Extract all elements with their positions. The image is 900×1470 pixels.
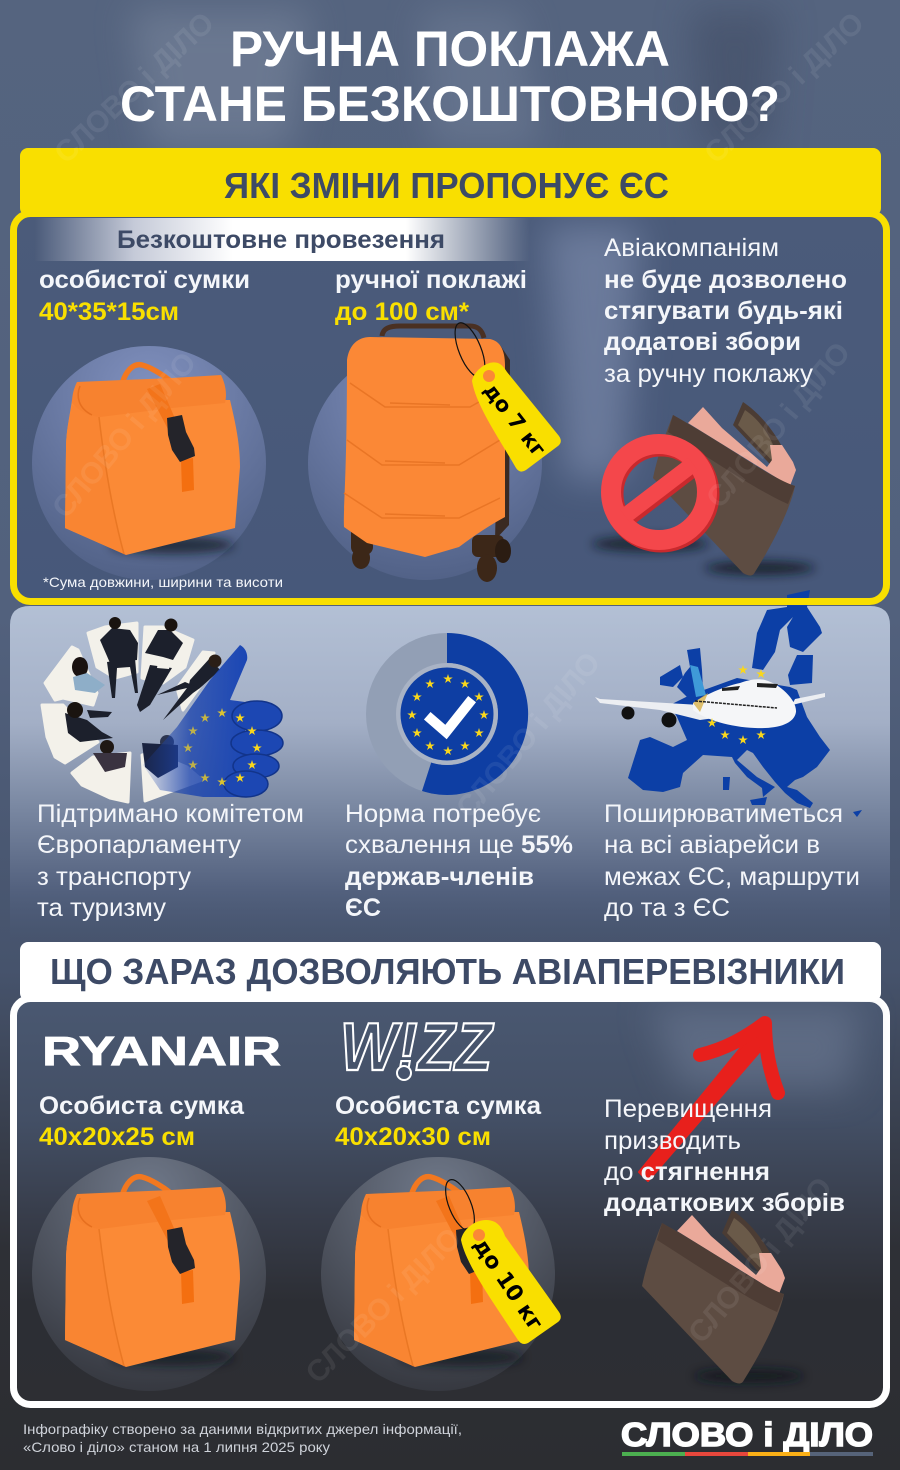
image: EU map with airplane bbox=[595, 590, 862, 817]
text: supported by committee: з транспорту bbox=[37, 863, 192, 891]
text: hand luggage: ручної поклажі bbox=[335, 266, 527, 294]
heading bar: what airlines allow now: ЩО ЗАРАЗ ДОЗВОЛЯЮТЬ АВІАПЕРЕВІЗНИКИ bbox=[50, 951, 845, 992]
text: personal bag bbox=[39, 266, 250, 326]
text: hand luggage: до 100 см* bbox=[335, 298, 469, 326]
heading bar: what airlines allow now bbox=[20, 942, 881, 1001]
text: personal bag: 40*35*15см bbox=[39, 298, 179, 326]
icon: wallet bbox=[642, 1210, 804, 1384]
text: supported by committee: Європарламенту bbox=[37, 831, 242, 859]
footnote: *Сума довжини, ширини та висоти bbox=[43, 574, 283, 590]
watermarks: СЛОВО і ДІЛО bbox=[450, 646, 607, 824]
footer source text bbox=[23, 1421, 462, 1455]
tag: up to 10 kg bbox=[440, 1176, 561, 1344]
text: excess leads to extra fees bbox=[604, 1095, 845, 1217]
text: excess leads to extra fees: призводить bbox=[604, 1127, 741, 1155]
text: airlines not allowed to charge: Авіакомпаніям bbox=[604, 234, 779, 262]
tag: up to 10 kg: до 10 кг bbox=[468, 1234, 547, 1335]
footer source text: «Слово і діло» станом на 1 липня 2025 року bbox=[23, 1439, 330, 1455]
text: airlines not allowed to charge bbox=[604, 234, 847, 388]
watermarks: СЛОВО і ДІЛО bbox=[300, 1222, 468, 1390]
logo: Wizz: W!ZZ bbox=[340, 1009, 494, 1085]
text: requires approval of 55%: Норма потребує bbox=[345, 800, 541, 828]
text: excess leads to extra fees: до стягнення bbox=[604, 1158, 770, 1186]
footer source text: Інфографіку створено за даними відкритих джерел інформації, bbox=[23, 1421, 462, 1437]
icon: wallet with prohibition sign bbox=[592, 402, 815, 576]
text: excess leads to extra fees: Перевищення bbox=[604, 1095, 772, 1123]
image: business meeting and EU thumb up bbox=[42, 617, 283, 802]
text: requires approval of 55%: схвалення ще 55% bbox=[345, 831, 573, 859]
logo: Ryanair: RYANAIR bbox=[42, 1028, 281, 1074]
text: hand luggage bbox=[335, 266, 527, 326]
text: applies to all flights: Поширюватиметься bbox=[604, 800, 843, 828]
logo: Slovo i Dilo: СЛОВО і ДІЛО bbox=[621, 1416, 873, 1453]
text: airlines not allowed to charge: стягувати будь-які bbox=[604, 297, 843, 325]
text: airlines not allowed to charge: не буде дозволено bbox=[604, 266, 847, 294]
watermarks: СЛОВО і ДІЛО bbox=[698, 6, 871, 170]
panel: proposed EU changes bbox=[14, 148, 886, 602]
text: applies to all flights: до та з ЄС bbox=[604, 894, 730, 922]
text: excess leads to extra fees: додаткових зборів bbox=[604, 1189, 845, 1217]
title: РУЧНА ПОКЛАЖА bbox=[230, 21, 670, 77]
heading bar: what the EU proposes bbox=[20, 148, 881, 216]
watermarks: СЛОВО і ДІЛО bbox=[682, 1171, 839, 1349]
tag: up to 7 kg: до 7 кг bbox=[479, 378, 550, 461]
text: Ryanair allowance bbox=[39, 1092, 245, 1151]
icon: orange suitcase with 7 kg tag bbox=[308, 319, 561, 582]
text: supported by committee: Підтримано комітетом bbox=[37, 800, 304, 828]
text: Wizz allowance: Особиста сумка bbox=[335, 1092, 542, 1120]
watermarks: СЛОВО і ДІЛО bbox=[700, 336, 857, 514]
title bbox=[120, 21, 780, 132]
icon: orange bag Wizz with 10 kg tag bbox=[321, 1157, 561, 1391]
text: personal bag: особистої сумки bbox=[39, 266, 250, 294]
text: Wizz allowance: 40х20х30 см bbox=[335, 1123, 491, 1151]
yellow border top layer over map bbox=[40, 598, 860, 605]
chart: 55% donut with EU check mark bbox=[366, 633, 528, 795]
text: Ryanair allowance: Особиста сумка bbox=[39, 1092, 245, 1120]
text: Wizz allowance bbox=[335, 1092, 542, 1151]
icon: orange personal bag bbox=[32, 346, 266, 580]
text: requires approval of 55%: держав-членів bbox=[345, 863, 534, 891]
text: applies to all flights bbox=[604, 800, 860, 922]
text: airlines not allowed to charge: за ручну поклажу bbox=[604, 360, 814, 388]
text: supported by committee bbox=[37, 800, 304, 922]
title: СТАНЕ БЕЗКОШТОВНОЮ? bbox=[120, 76, 780, 132]
text: requires approval of 55%: ЄС bbox=[345, 894, 381, 922]
subheading band: free carriage: Безкоштовне провезення bbox=[117, 226, 445, 254]
panel: what airlines allow now bbox=[14, 942, 886, 1404]
watermarks: СЛОВО і ДІЛО bbox=[48, 6, 221, 170]
text: requires approval of 55% bbox=[345, 800, 573, 922]
icon: red rising arrow bbox=[639, 1023, 778, 1181]
text: applies to all flights: на всі авіарейси в bbox=[604, 831, 820, 859]
tag: up to 7 kg bbox=[449, 319, 561, 472]
text: applies to all flights: межах ЄС, маршрути bbox=[604, 863, 860, 891]
text: Ryanair allowance: 40х20х25 см bbox=[39, 1123, 195, 1151]
heading bar: what the EU proposes: ЯКІ ЗМІНИ ПРОПОНУЄ ЄС bbox=[224, 165, 669, 206]
panel: approval and scope bbox=[10, 590, 890, 940]
subheading band: free carriage bbox=[35, 218, 530, 261]
watermarks: СЛОВО і ДІЛО bbox=[46, 346, 203, 524]
icon: orange bag Ryanair bbox=[32, 1157, 266, 1391]
text: airlines not allowed to charge: додатові збори bbox=[604, 328, 801, 356]
text: supported by committee: та туризму bbox=[37, 894, 167, 922]
